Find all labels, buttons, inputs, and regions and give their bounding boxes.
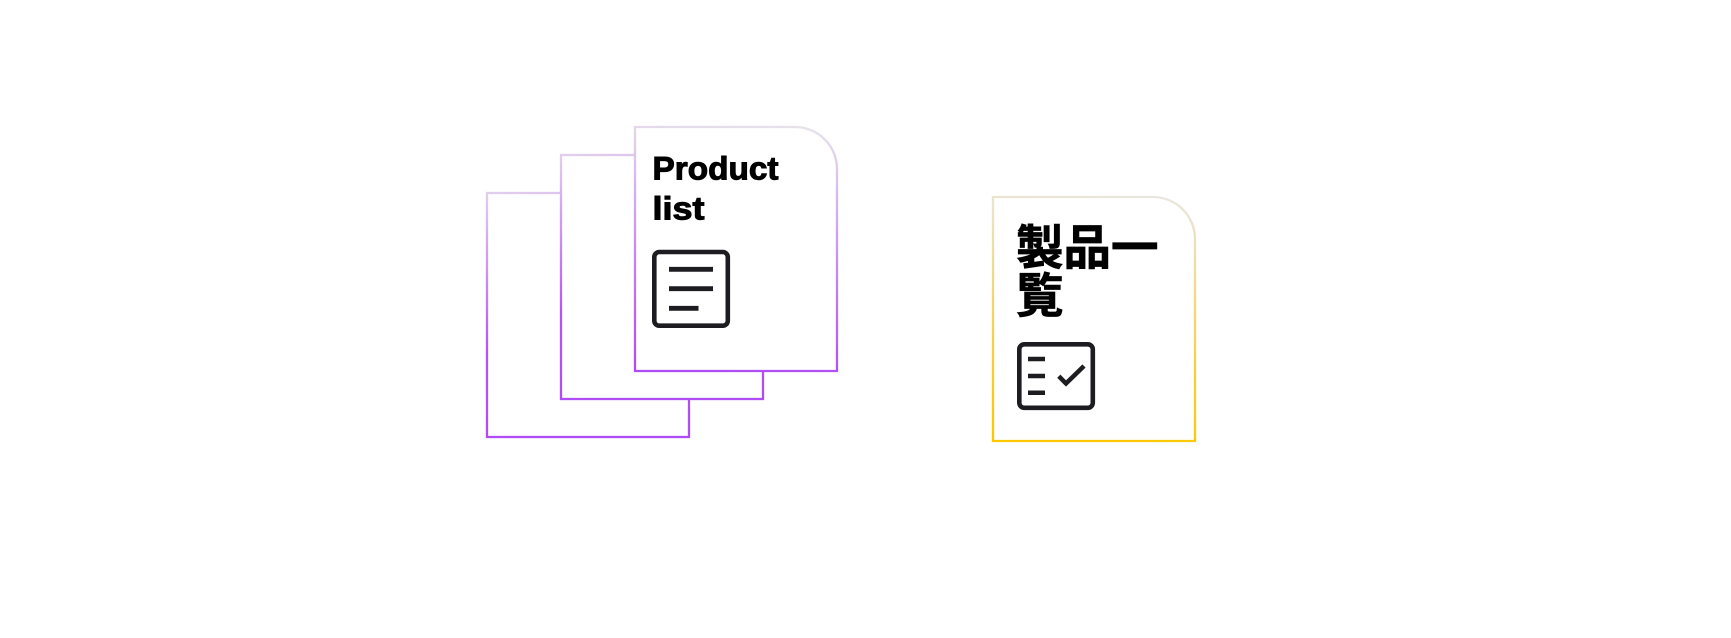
panel: Product list card [635, 127, 837, 371]
heading: Product list: Product [652, 150, 779, 186]
heading: 製品一覧: 製品一 [1016, 222, 1158, 276]
heading: Product list [652, 150, 779, 226]
icon: list document [654, 252, 728, 326]
back card [487, 193, 689, 437]
panel: 製品一覧 card [993, 197, 1195, 441]
front card outline [635, 127, 837, 371]
heading: 製品一覧: 覧 [1016, 270, 1064, 324]
middle card [561, 155, 763, 399]
yellow card outline [993, 197, 1195, 441]
heading: 製品一覧 [1016, 222, 1158, 324]
icon: checklist [1019, 344, 1093, 408]
heading: Product list: list [652, 190, 705, 226]
